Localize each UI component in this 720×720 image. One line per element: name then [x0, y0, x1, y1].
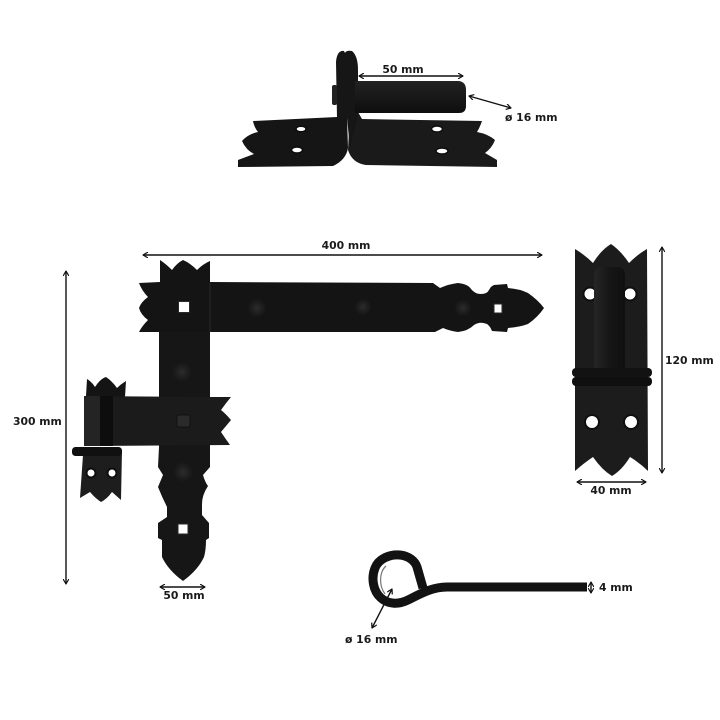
arrow: 120 mm [661, 247, 663, 473]
square rivet [177, 415, 190, 427]
arrow: hook diameter [372, 589, 392, 628]
vertical strap [158, 330, 210, 581]
plate [575, 244, 648, 476]
gate strap with pintle [72, 377, 231, 502]
hook [373, 555, 587, 603]
right flange [348, 112, 497, 167]
side knob [332, 85, 337, 105]
right pintle plate [572, 244, 652, 476]
barrel shading [100, 396, 113, 446]
inner highlight [381, 566, 386, 594]
left flange [238, 117, 348, 167]
top view: pintle plate [238, 51, 497, 167]
barrel highlight [84, 396, 100, 446]
label: 40 mm: 40 mm [590, 484, 632, 497]
arrow: diameter 16 mm [469, 96, 511, 108]
main L hinge [139, 260, 544, 581]
strap [84, 396, 231, 446]
arrow: 50 mm strap width [160, 586, 205, 588]
arrow: 50 mm [359, 75, 463, 77]
horizontal strap [139, 260, 544, 332]
arrow: 300 mm [65, 271, 67, 584]
label: 300 mm: 300 mm [13, 415, 62, 428]
arrow: 4 mm [590, 582, 592, 593]
collar [572, 368, 652, 377]
label: 120 mm: 120 mm [665, 354, 714, 367]
pin [355, 81, 466, 113]
vertical tab [336, 51, 358, 148]
collar [72, 447, 122, 456]
holes [584, 288, 638, 429]
square holes [178, 302, 190, 312]
arrow: 40 mm [577, 481, 646, 483]
pin [594, 267, 625, 372]
label: 50 mm: 50 mm [382, 63, 424, 76]
arrow: 400 mm [143, 254, 542, 256]
rivets [172, 299, 471, 482]
lower plate [80, 450, 122, 502]
label: 400 mm: 400 mm [322, 239, 370, 252]
label: hook diameter: ø 16 mm [345, 633, 397, 646]
label: diameter 16 mm: ø 16 mm [505, 111, 557, 124]
label: 50 mm strap width: 50 mm [163, 589, 205, 602]
flange holes [292, 126, 448, 154]
plate holes [86, 468, 116, 478]
seam [209, 283, 211, 332]
label: 4 mm: 4 mm [599, 581, 633, 594]
crown [86, 377, 126, 397]
hook body [373, 555, 587, 603]
